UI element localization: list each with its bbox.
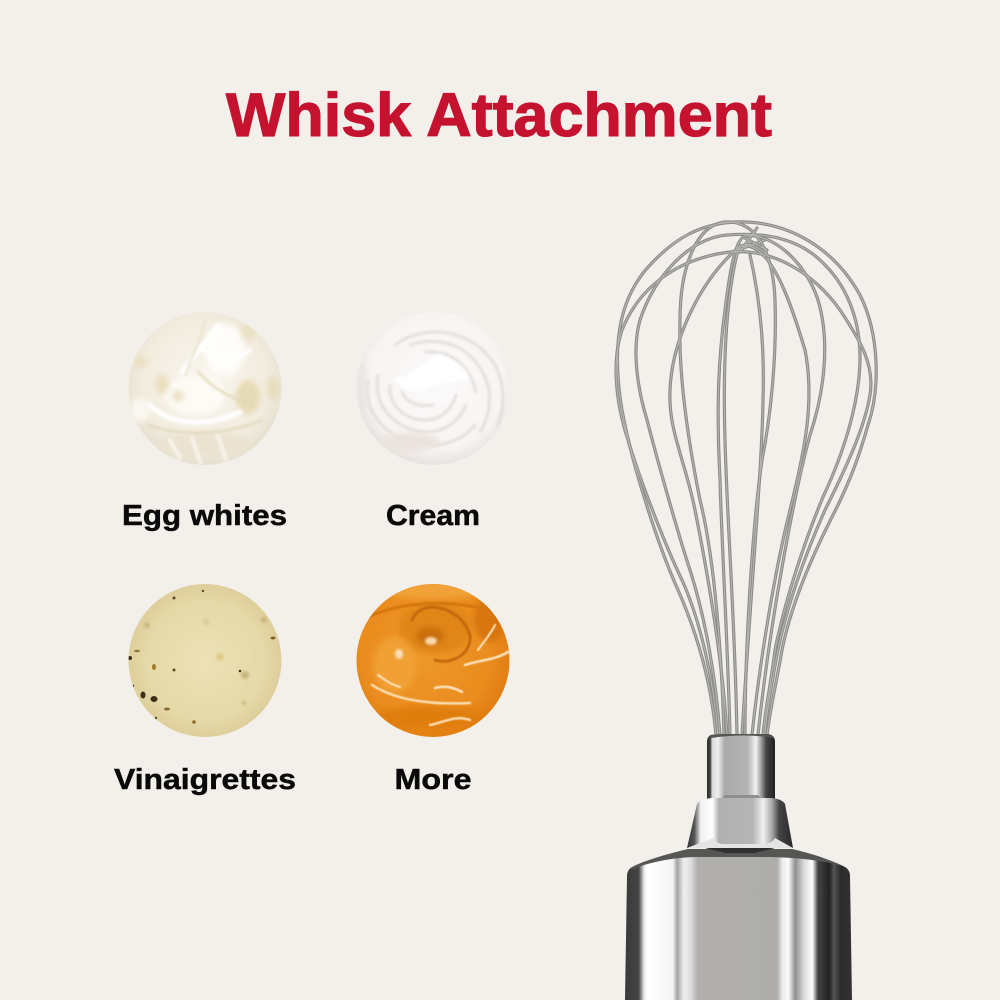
photo: vinaigrette (128, 584, 282, 738)
whisk wires (616, 222, 876, 735)
title: Whisk Attachment (226, 81, 772, 149)
whisk collar (707, 734, 775, 800)
photo: cream swirl (356, 312, 510, 466)
panel: more (356, 581, 510, 796)
collar step (722, 795, 762, 800)
whisk illustration (616, 222, 876, 1000)
label: egg whites: Egg whites (122, 500, 287, 532)
panel: cream (356, 312, 510, 532)
body top recess (705, 848, 775, 853)
photo: egg whites (128, 312, 282, 466)
motor body (625, 849, 852, 1000)
panel: egg whites (122, 312, 287, 532)
panel: vinaigrettes (114, 584, 296, 796)
label: cream: Cream (386, 500, 480, 532)
label: vinaigrettes: Vinaigrettes (114, 764, 296, 796)
body top shadow (630, 849, 843, 870)
whisk cone (687, 798, 793, 848)
label: more: More (394, 764, 472, 796)
collar rim (711, 734, 774, 738)
photo: orange sauce (356, 581, 510, 738)
cone base (687, 838, 793, 848)
